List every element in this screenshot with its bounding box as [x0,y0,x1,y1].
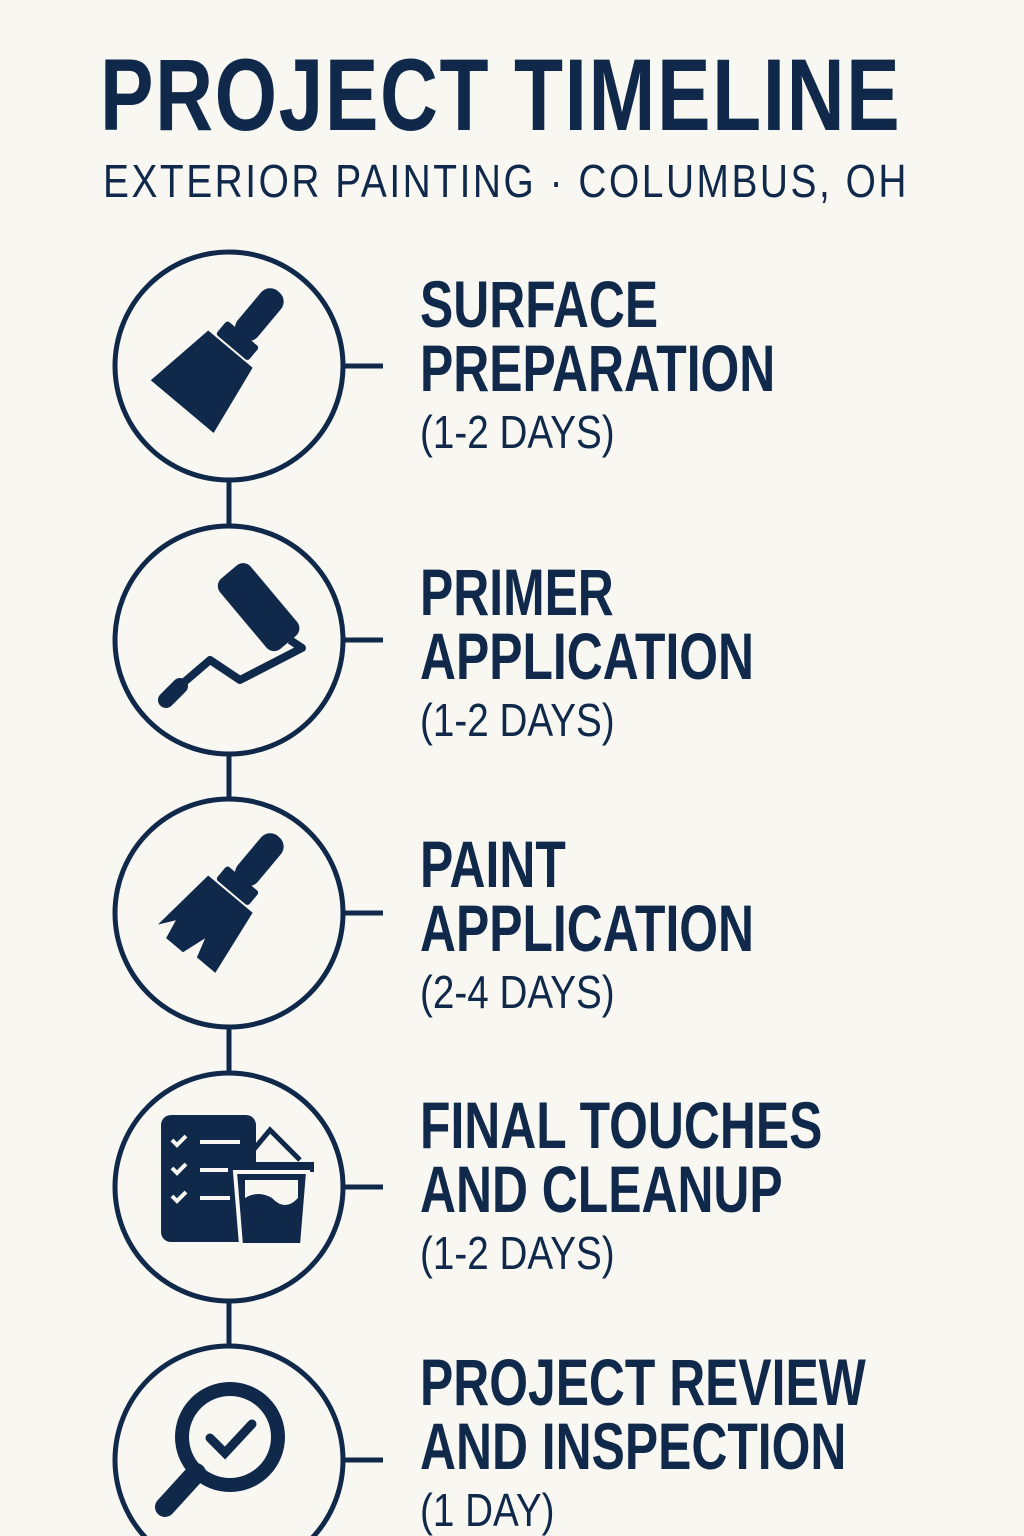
step 2 text: APPLICATION [420,619,754,693]
step 4 text [420,1088,822,1279]
step 1 node [115,252,383,480]
step 3 text [420,827,754,1018]
step 1 text [420,267,775,458]
step 3 text: PAINT [420,827,566,901]
step 4 text: AND CLEANUP [420,1152,783,1226]
step 1 text: SURFACE [420,267,658,341]
step 5 text [420,1345,866,1536]
title: PROJECT TIMELINE [100,38,901,152]
step 4 text: FINAL TOUCHES [420,1088,822,1162]
step 1 text: (1-2 DAYS) [420,406,615,458]
subtitle: EXTERIOR PAINTING · COLUMBUS, OH [103,155,909,207]
step 4 text: (1-2 DAYS) [420,1227,615,1279]
step 2 text: PRIMER [420,555,614,629]
step 3 text: (2-4 DAYS) [420,966,615,1018]
step 2 text [420,555,754,746]
step 3 text: APPLICATION [420,891,754,965]
step 1 text: PREPARATION [420,331,775,405]
step 5 text: (1 DAY) [420,1484,555,1536]
step 3 node [115,799,383,1027]
step 5 node [115,1346,383,1536]
step 5 text: PROJECT REVIEW [420,1345,866,1419]
step 5 text: AND INSPECTION [420,1409,846,1483]
step 4 node [115,1073,383,1301]
step 2 text: (1-2 DAYS) [420,694,615,746]
step 2 node [115,526,383,754]
